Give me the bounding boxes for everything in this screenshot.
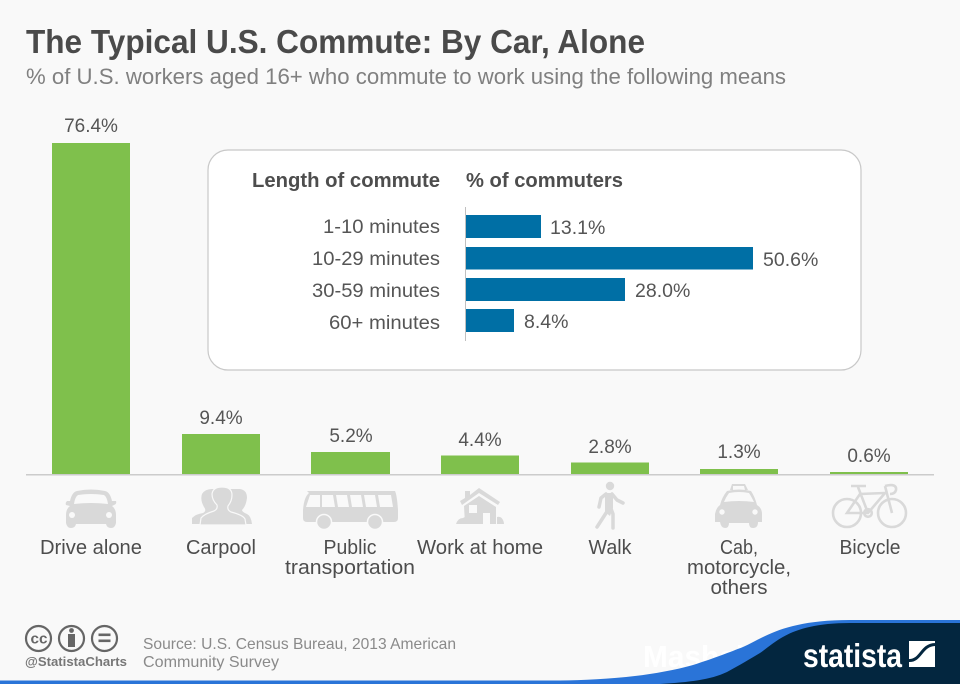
subtitle: % of U.S. workers aged 16+ who commute to work using the following means: [26, 64, 786, 89]
handle: @StatistaCharts: [25, 655, 127, 669]
bar chart: commute means: 5.2%: [329, 426, 373, 447]
row labels: 10-29 minutes: [312, 248, 440, 270]
icon: house: [456, 488, 504, 524]
icon: statista mark: [909, 641, 935, 667]
icon: car: [66, 490, 116, 528]
row labels: 30-59 minutes: [312, 280, 440, 302]
category labels: Drive alone: [40, 537, 142, 559]
category labels: Carpool: [186, 537, 256, 559]
category labels: Public: [324, 537, 376, 559]
category labels: Cab,: [720, 537, 758, 559]
icon: walker: [597, 482, 623, 528]
source: [143, 636, 456, 671]
category labels: Work at home: [417, 537, 543, 559]
inset bar chart: 50.6%: [763, 249, 818, 271]
watermark: Mashable: [643, 639, 779, 674]
row labels: 60+ minutes: [329, 312, 440, 334]
category labels: Bicycle: [840, 537, 900, 559]
inset bar chart: 13.1%: [550, 217, 605, 239]
footer wave: [0, 620, 960, 684]
panel headings: Length of commute: [252, 170, 440, 192]
icon: bus: [303, 491, 398, 530]
category labels: others: [710, 577, 768, 599]
panel headings: [252, 170, 623, 192]
bar chart: commute means: 9.4%: [199, 408, 243, 429]
icon: creative commons licence: [26, 626, 117, 651]
title: The Typical U.S. Commute: By Car, Alone: [26, 23, 645, 60]
icon: creative commons licence: cc: [30, 630, 48, 648]
panel: length of commute: [208, 150, 861, 370]
category labels: Walk: [588, 537, 632, 559]
icon: taxi: [715, 484, 762, 528]
category labels: motorcycle,: [687, 557, 791, 579]
icon: bicycle: [833, 485, 906, 527]
inset bar chart: 28.0%: [635, 280, 690, 302]
inset bar chart: [465, 207, 818, 341]
bar chart: commute means: 76.4%: [64, 116, 118, 137]
bar chart: commute means: 0.6%: [847, 446, 891, 467]
source: Community Survey: [143, 654, 279, 671]
bar chart: commute means: 2.8%: [588, 437, 632, 458]
category labels: [40, 537, 900, 599]
category labels: transportation: [285, 557, 415, 579]
row labels: 1-10 minutes: [323, 216, 440, 238]
bar chart: commute means: 4.4%: [458, 430, 502, 451]
bar chart: commute means: 1.3%: [717, 442, 761, 463]
source: Source: U.S. Census Bureau, 2013 American: [143, 636, 456, 653]
statista logo: statista: [803, 637, 903, 674]
row labels: [312, 216, 440, 334]
bar chart: commute means: [26, 116, 934, 476]
panel headings: % of commuters: [466, 170, 623, 192]
inset bar chart: 8.4%: [524, 311, 568, 333]
icon: people: [192, 487, 252, 525]
